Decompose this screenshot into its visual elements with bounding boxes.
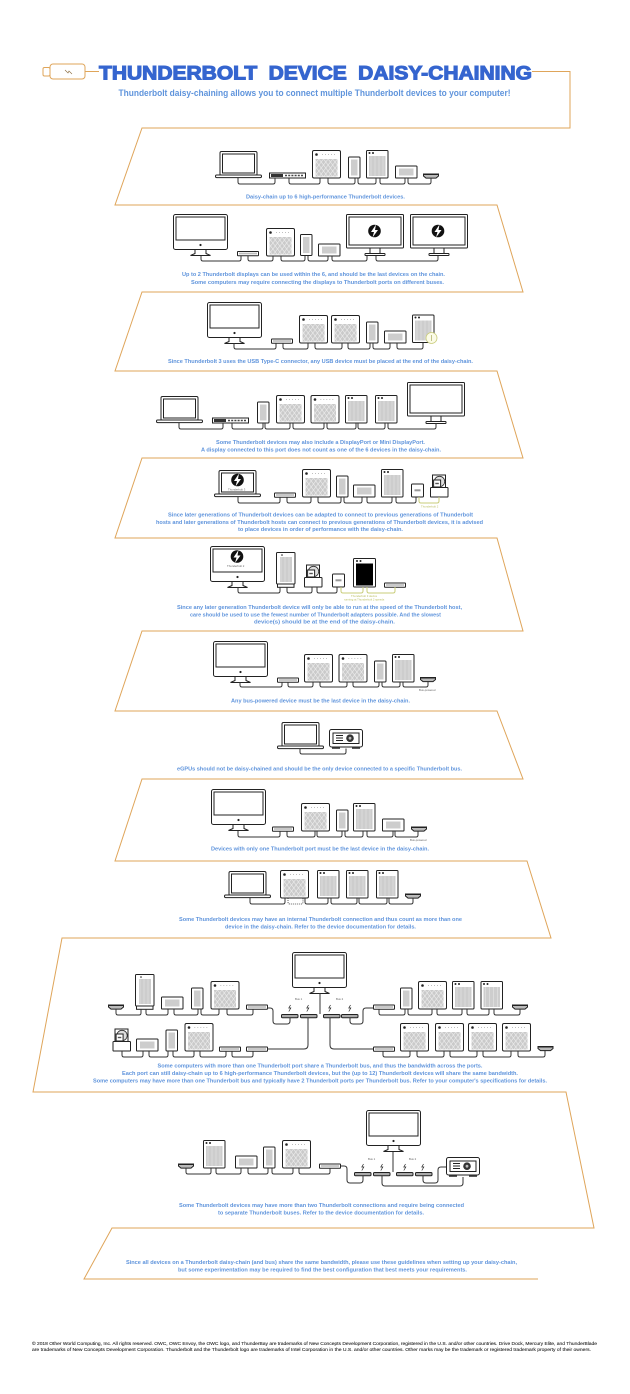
host label: Thunderbolt 3 [228,488,246,492]
tall drive [366,150,388,178]
lower left chain [113,1024,268,1057]
imac [292,952,346,994]
panel: later generations adapted [156,470,484,533]
panel: two bus connection [178,1110,480,1216]
bus labels: Bus 2 [409,1157,417,1161]
caption: Any bus-powered device must be the last device in the daisy-chain. [231,698,410,704]
bus labels: Bus 1 [368,1157,376,1161]
small drive [348,157,360,178]
caption [179,1203,465,1216]
logo [432,224,444,238]
closing note: Since all devices on a Thunderbolt daisy-chain (and bus) share the same bandwidth, please use these guidelines when setting up your daisy-chain, [126,1260,517,1266]
display 2 [410,214,468,256]
flat device [272,339,292,343]
adapter labels: Thunderbolt 3 device [351,594,378,598]
logo [231,474,244,486]
legal footer: are trademarks of New Concepts Development Corporation. Thunderbolt and the Thunderbolt logo are trademarks of Intel Corporation in the U.S. and/or other countries. Other marks may be the trademark or registered trademark property of their owners. [32,1347,591,1352]
raid drive [304,654,332,682]
cables [234,343,423,349]
cables [238,831,418,837]
caption: device(s) should be at the end of the daisy-chain. [254,620,395,626]
laptop [224,872,270,898]
caption: to place devices in order of performance with the daisy-chain. [238,527,403,533]
tall drive [354,804,375,831]
logo [368,224,381,238]
logo [231,550,243,563]
links to ports [267,993,373,1049]
caption: Up to 2 Thunderbolt displays can be used within the 6, and should be the last devices on the chain. [182,272,445,278]
box drive [382,819,404,831]
raid drive [302,804,330,831]
caption [201,440,441,454]
small drive [258,402,269,423]
caption: Some Thunderbolt devices may have an internal Thunderbolt connection and thus count as more than one [179,917,462,923]
raid drive [300,316,328,343]
bolt icons [289,1005,351,1012]
panel: multiple buses [93,952,553,1084]
display [408,382,464,424]
caption: device in the daisy-chain. Refer to the device documentation for details. [225,924,416,930]
caption [156,512,484,533]
tall drive [318,870,339,898]
box drive [384,331,406,343]
links to ports [341,1152,463,1186]
tall drive [392,654,414,682]
upper right chain [374,982,528,1015]
tall drive [376,870,398,898]
caption: Devices with only one Thunderbolt port must be the last device in the daisy-chain. [211,846,429,852]
panel: usb device last [168,302,473,365]
panel: up to 6 devices [216,150,438,200]
adapter cable [419,497,439,503]
panel: displays [174,214,468,286]
laptop [214,470,260,497]
panel: internal connection [179,870,462,930]
adapter [412,484,424,497]
laptop [156,396,202,423]
left chain [178,1140,340,1174]
imac [214,642,268,682]
caption: Some computers may have more than one Thunderbolt bus and typically have 2 Thunderbolt ports per Thunderbolt bus. Refer to your computer's specifications for details. [93,1078,547,1084]
small drive [374,661,386,682]
caption [179,917,462,930]
cables [238,587,337,593]
imac [212,790,266,830]
cables [250,898,413,904]
caption: A display connected to this port does not count as one of the 6 devices in the daisy-chain. [201,448,441,454]
flat device [384,583,406,587]
box drive [318,244,340,256]
cables [179,423,436,429]
usb badge [426,332,437,344]
caption: Since any later generation Thunderbolt device will only be able to run at the speed of the Thunderbolt host, [177,605,462,611]
small drive [336,810,348,831]
tall drive [346,870,368,898]
host label: Thunderbolt 2 [227,564,245,568]
tall drive on base [276,552,295,587]
port 2 [374,1172,390,1176]
cables [201,256,438,261]
tall drive [346,396,367,423]
port 4 [416,1172,432,1176]
raid drive [280,870,308,898]
caption: Daisy-chain up to 6 high-performance Thunderbolt devices. [246,194,405,200]
caption: care should be used to use the fewest number of Thunderbolt adapters possible. And the slowest [190,612,441,618]
adapter labels [344,594,385,602]
caption [93,1064,547,1084]
flat device [274,493,296,497]
imac [210,546,264,588]
dock [212,418,248,423]
dock [270,173,306,178]
cable [300,748,346,754]
caption: hosts and later generations of Thunderbolt hosts can connect to previous generations of Thunderbolt devices, it is advised [156,520,484,526]
tall drive [376,396,397,423]
adapter labels: Thunderbolt 2 [421,504,439,508]
small drive [336,476,348,497]
title: THUNDERBOLT DEVICE DAISY-CHAINING [99,64,532,84]
flat device [238,252,258,256]
display 1 [346,214,404,256]
adapter labels: running at Thunderbolt 2 speeds [344,598,385,602]
port 4 [342,1014,358,1018]
legal footer: © 2018 Other World Computing, Inc. All rights reserved. OWC, OWC Envoy, the OWC logo, and ThunderBay are trademarks of New Concepts Development Corporation, registered in the U.S. and/or other countries. Drive Dock, Mercury Elite, and ThunderBlade [32,1340,597,1346]
tall usb drive [412,315,434,342]
internal dotted connection [288,898,303,904]
raid drive [339,654,367,682]
caption: eGPUs should not be daisy-chained and should be the only device connected to a specific Thunderbolt bus. [177,766,462,772]
lower right chain [374,1024,553,1057]
laptop [278,722,324,749]
box drive [354,485,375,497]
panel: displayport [156,382,464,454]
upper left chain [108,974,268,1015]
bus-powered label: Bus-powered [419,688,436,692]
egpu [446,1158,480,1177]
cables [238,497,416,503]
adapter [332,574,344,587]
caption: Some Thunderbolt devices may have more than two Thunderbolt connections and require being connected [179,1203,465,1209]
box drive [396,166,417,178]
legal footer [32,1340,597,1352]
bus-powered drive [420,678,436,682]
bus labels: Bus 1 [295,997,303,1001]
flat device [278,678,298,682]
bolt icons [362,1164,424,1170]
caption [182,272,445,286]
raid drive [312,150,340,178]
raid drive [332,316,360,343]
caption: Each port can still daisy-chain up to 6 high-performance Thunderbolt devices, but the (up to 12) Thunderbolt devices will share the same bandwidth. [122,1071,518,1077]
raid drive [266,228,294,256]
black tall drive [354,558,376,587]
raid drive [276,396,304,423]
subtitle: Thunderbolt daisy-chaining allows you to connect multiple Thunderbolt devices to your computer! [118,87,510,98]
cables [238,178,431,184]
panel: host speed [177,546,462,626]
caption: Since Thunderbolt 3 uses the USB Type-C connector, any USB device must be placed at the end of the daisy-chain. [168,359,473,365]
port 2 [300,1014,317,1018]
caption: Some Thunderbolt devices may also include a DisplayPort or Mini DisplayPort. [216,440,425,446]
bus-powered label: Bus-powered [410,838,427,842]
closing note: but some experimentation may be required to find the best configuration that best meets your requirements. [178,1268,467,1274]
panel: bus-powered [214,642,436,704]
small drive [366,322,378,343]
imac [366,1110,420,1152]
small drive [300,234,312,256]
closing note [126,1260,517,1274]
cables [240,682,428,687]
caption [177,605,462,626]
imac [208,302,262,344]
bus labels [368,1157,417,1161]
hdd dock [304,565,322,587]
bus labels [295,997,344,1001]
panel: single port [211,790,429,852]
port 1 [282,1014,298,1018]
bus labels: Bus 2 [336,997,344,1001]
caption: Some computers with more than one Thunderbolt port share a Thunderbolt bus, and thus the bandwidth across the ports. [158,1064,483,1070]
hdd dock [430,475,448,497]
raid drive [302,470,330,497]
orange frame connecting all panels [33,72,594,1279]
tall drive [382,470,403,497]
caption: Since later generations of Thunderbolt devices can be adapted to connect to previous generations of Thunderbolt [168,512,473,518]
adapter cables [341,587,395,593]
egpu [330,730,362,749]
panel: egpu [177,722,462,772]
flat device [272,827,294,831]
bus-powered drive [406,894,420,898]
icon: thunderbolt cable plug [43,64,85,79]
bus-powered drive [424,174,438,178]
raid drive [311,396,339,423]
caption: Some computers may require connecting the displays to Thunderbolt ports on different buses. [191,280,444,286]
caption: to separate Thunderbolt buses. Refer to the device documentation for details. [218,1210,424,1216]
laptop [216,152,262,178]
single port drive [412,827,426,831]
port 3 [396,1172,413,1176]
imac [174,214,228,256]
port 1 [354,1172,371,1176]
port 3 [324,1014,340,1018]
